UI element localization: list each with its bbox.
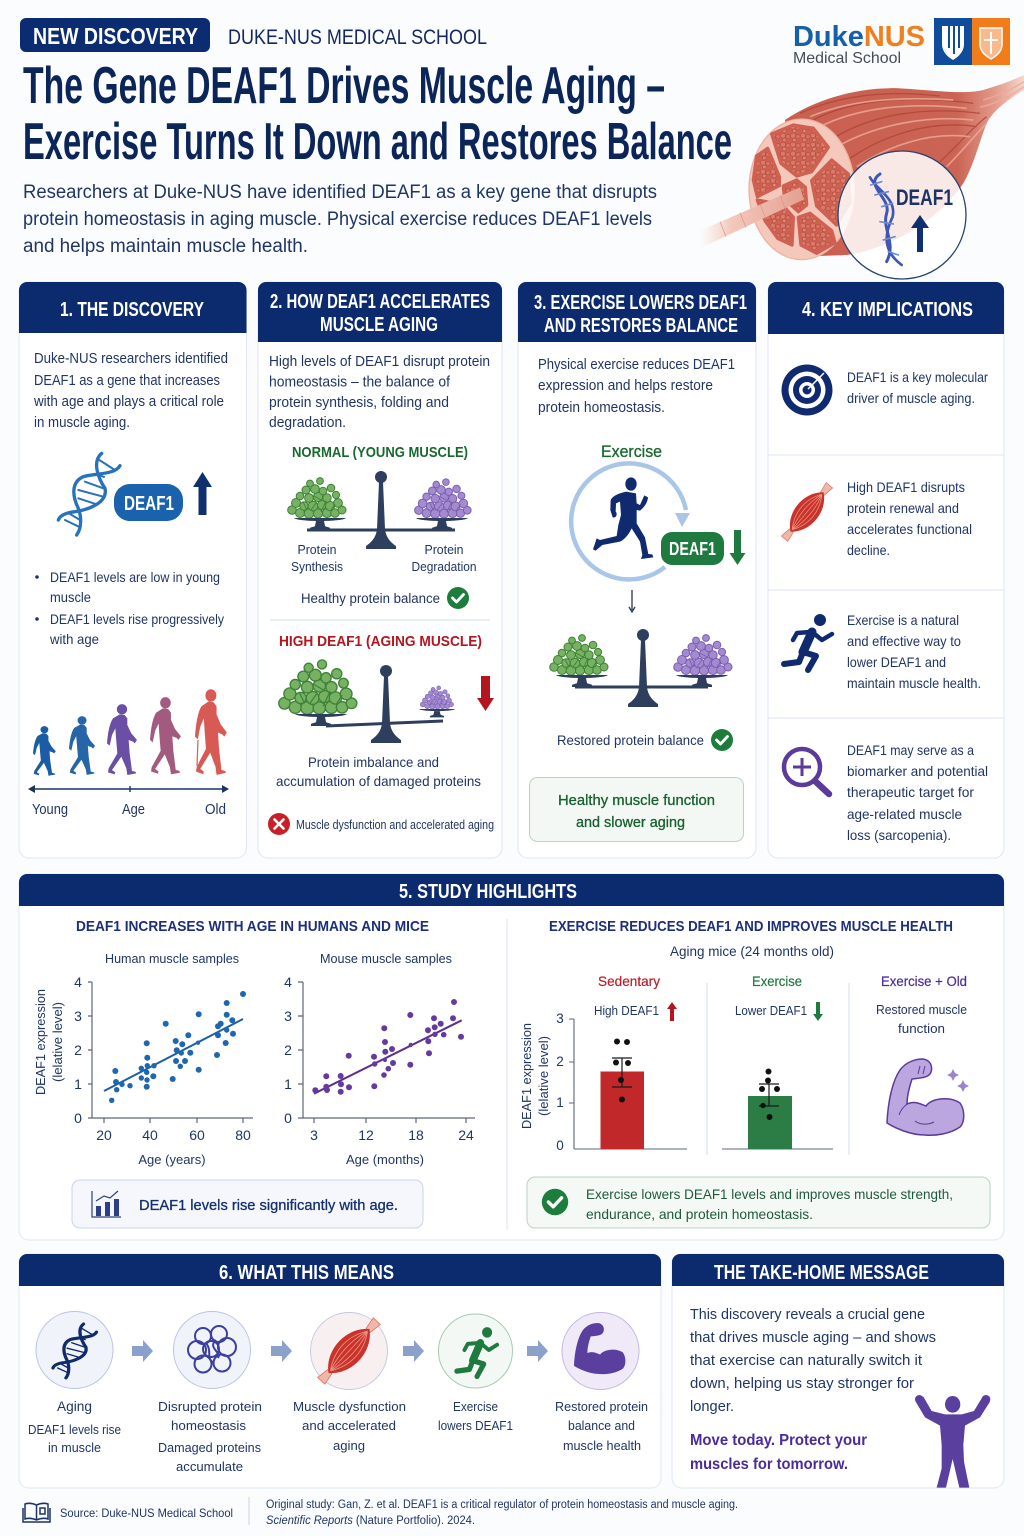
arrow 3 bbox=[403, 1340, 424, 1362]
implication text: exercise: lower DEAF1 and bbox=[847, 654, 946, 670]
chart: human scatter: 80 bbox=[235, 1127, 251, 1143]
call to action: muscles for tomorrow. bbox=[690, 1456, 848, 1473]
label: protein synthesis: Protein bbox=[298, 542, 336, 557]
text block bbox=[33, 350, 228, 431]
step 3: muscle dysfunction: Muscle dysfunction bbox=[293, 1399, 406, 1414]
step 3: muscle dysfunction: and accelerated bbox=[302, 1418, 396, 1433]
footer: source: Source: Duke-NUS Medical School bbox=[60, 1506, 233, 1520]
DEAF1 pill green bbox=[661, 532, 724, 565]
restored balance note bbox=[557, 729, 733, 751]
step 4: exercise: lowers DEAF1 bbox=[438, 1418, 513, 1433]
bar chart: sedentary: 2 bbox=[556, 1054, 564, 1069]
arrow down red bbox=[477, 676, 494, 711]
bar chart: sedentary: Sedentary bbox=[598, 973, 660, 989]
implication text: renewal: High DEAF1 disrupts bbox=[847, 479, 965, 495]
implication text: exercise: Exercise is a natural bbox=[847, 612, 959, 628]
text block: down, helping us stay stronger for bbox=[690, 1375, 914, 1392]
text block: degradation. bbox=[269, 414, 346, 431]
text block bbox=[690, 1306, 936, 1415]
chart: mouse scatter: Age (months) bbox=[346, 1152, 424, 1167]
arrow up bbox=[193, 472, 212, 515]
step 1: aging: Aging bbox=[57, 1398, 92, 1414]
intro text bbox=[23, 182, 657, 257]
exercise label: Exercise bbox=[601, 442, 662, 461]
implication text: driver: driver of muscle aging. bbox=[847, 390, 975, 406]
DEAF1 pill bbox=[114, 484, 183, 521]
text block: that exercise can naturally switch it bbox=[690, 1352, 923, 1369]
intro text: and helps maintain muscle health. bbox=[23, 236, 308, 257]
aging figures bbox=[33, 689, 227, 776]
callout: rise with age: DEAF1 levels rise significantly with age. bbox=[139, 1197, 398, 1214]
label: protein synthesis: Synthesis bbox=[291, 559, 343, 574]
callout: exercise benefit bbox=[527, 1177, 990, 1228]
step 5: restored bbox=[555, 1312, 648, 1453]
step 1: aging bbox=[28, 1312, 121, 1455]
arrow 2 bbox=[271, 1340, 292, 1362]
step 2: disrupted homeostasis bbox=[158, 1312, 262, 1474]
text block bbox=[538, 356, 735, 416]
chart: human scatter: 1 bbox=[74, 1076, 82, 1092]
heading: 5. STUDY HIGHLIGHTS bbox=[399, 881, 577, 903]
step 1: aging: in muscle bbox=[48, 1440, 101, 1455]
heading: 3. EXERCISE LOWERS DEAF1 bbox=[534, 292, 747, 314]
institution name: DUKE-NUS MEDICAL SCHOOL bbox=[228, 26, 487, 49]
step 3: muscle dysfunction: aging bbox=[333, 1438, 365, 1453]
y axis title right: DEAF1 expression bbox=[520, 1023, 534, 1129]
footer: citation bbox=[266, 1499, 738, 1527]
panel: 6. what this means bbox=[19, 1254, 661, 1488]
label: protein degradation: Degradation bbox=[412, 559, 476, 574]
implication text: exercise bbox=[847, 612, 981, 691]
badge: new discovery: NEW DISCOVERY bbox=[33, 23, 198, 49]
intro text: protein homeostasis in aging muscle. Physical exercise reduces DEAF1 levels bbox=[23, 209, 652, 230]
step 2: disrupted homeostasis: Disrupted protein bbox=[158, 1399, 262, 1414]
heading: 1. THE DISCOVERY bbox=[60, 299, 205, 321]
balance scale: normal bbox=[288, 471, 471, 549]
exercise loop with runner bbox=[571, 463, 690, 579]
implication text: exercise: and effective way to bbox=[847, 633, 961, 649]
step 5: restored: muscle health bbox=[563, 1438, 641, 1453]
bar chart: exercise bbox=[722, 973, 833, 1149]
text block: imbalance bbox=[276, 754, 481, 789]
connector arrow bbox=[629, 590, 635, 612]
panel: take-home message bbox=[672, 1254, 1004, 1488]
column: exercise + old: function bbox=[898, 1021, 945, 1036]
label: protein synthesis bbox=[291, 542, 343, 574]
badge: new discovery bbox=[20, 18, 210, 52]
DEAF1 pill green: DEAF1 bbox=[669, 539, 716, 559]
implication text: renewal: accelerates functional bbox=[847, 521, 972, 537]
callout: healthy function: Healthy muscle function bbox=[558, 792, 715, 809]
chart: mouse scatter: 4 bbox=[284, 974, 292, 990]
intro text: Researchers at Duke-NUS have identified DEAF1 as a key gene that disrupts bbox=[23, 182, 657, 203]
column: exercise + old: Restored muscle bbox=[876, 1002, 967, 1017]
callout: DEAF1 magnified circle bbox=[838, 151, 966, 279]
y axis title right: (lelative level) bbox=[537, 1036, 551, 1116]
callout: healthy function: and slower aging bbox=[576, 814, 685, 831]
implication text: biomarker: age-related muscle bbox=[847, 806, 962, 822]
icon: flexed arm bbox=[887, 1059, 969, 1135]
heading: THE TAKE-HOME MESSAGE bbox=[714, 1262, 929, 1284]
illustration: muscle cross-section bbox=[700, 75, 1024, 279]
chart caption: Aging mice (24 months old) bbox=[670, 944, 834, 959]
step 2: disrupted homeostasis: accumulate bbox=[176, 1459, 243, 1474]
logo: Duke-NUS: DukeNUS bbox=[793, 21, 925, 53]
implication text: renewal: protein renewal and bbox=[847, 500, 959, 516]
icon: person with raised arms bbox=[915, 1395, 990, 1488]
chart: human scatter: 2 bbox=[74, 1042, 82, 1058]
callout: exercise benefit: endurance, and protein homeostasis. bbox=[586, 1206, 813, 1222]
panel: 5. study highlights bbox=[19, 874, 1004, 1240]
step 2: disrupted homeostasis: homeostasis bbox=[171, 1418, 247, 1433]
chart: mouse scatter: 12 bbox=[358, 1127, 374, 1143]
icon: magnifier bbox=[784, 749, 829, 794]
implication text: driver bbox=[847, 369, 988, 406]
implication text: biomarker: therapeutic target for bbox=[847, 784, 974, 800]
icon: runner bbox=[784, 614, 832, 670]
label: protein degradation bbox=[412, 542, 476, 574]
bullet list: DEAF1 levels are low in young bbox=[50, 569, 220, 585]
chart: mouse scatter bbox=[284, 951, 475, 1167]
implication text: exercise: maintain muscle health. bbox=[847, 675, 981, 691]
icon: bar chart bbox=[92, 1191, 121, 1217]
text block: imbalance: accumulation of damaged proteins bbox=[276, 773, 481, 789]
dysfunction note bbox=[268, 813, 494, 835]
restored balance note: Restored protein balance bbox=[557, 733, 704, 748]
callout: exercise benefit: Exercise lowers DEAF1 levels and improves muscle strength, bbox=[586, 1186, 953, 1202]
arrow down green bbox=[730, 530, 746, 565]
heading: 2. HOW DEAF1 ACCELERATES bbox=[270, 291, 490, 313]
healthy balance note: Healthy protein balance bbox=[301, 591, 440, 606]
text block: imbalance: Protein imbalance and bbox=[308, 754, 439, 770]
bar chart: sedentary: 1 bbox=[556, 1095, 564, 1110]
title bbox=[23, 57, 732, 171]
chart: mouse scatter: 18 bbox=[408, 1127, 424, 1143]
text block: in muscle aging. bbox=[34, 414, 130, 431]
bullet list: DEAF1 levels rise progressively bbox=[50, 611, 224, 627]
text block bbox=[269, 353, 490, 431]
panel: 3. exercise lowers DEAF1 bbox=[518, 282, 756, 858]
chart: mouse scatter: 0 bbox=[284, 1110, 292, 1126]
implication text: biomarker: loss (sarcopenia). bbox=[847, 827, 951, 843]
subheading: age: DEAF1 INCREASES WITH AGE IN HUMANS AND MICE bbox=[76, 918, 429, 935]
bar chart: sedentary: High DEAF1 bbox=[594, 1003, 659, 1018]
panel: 1. the discovery bbox=[19, 282, 246, 858]
text block: longer. bbox=[690, 1398, 734, 1415]
age axis arrow: Old bbox=[205, 802, 226, 818]
implication text: renewal: decline. bbox=[847, 542, 890, 558]
y axis title left bbox=[33, 989, 65, 1095]
implication text: biomarker: biomarker and potential bbox=[847, 763, 988, 779]
text block: protein synthesis, folding and bbox=[269, 394, 449, 411]
logo: Duke-NUS bbox=[793, 18, 1010, 67]
footer: citation: Original study: Gan, Z. et al. DEAF1 is a critical regulator of protein homeostasis and muscle aging. bbox=[266, 1499, 738, 1511]
balance scale: restored bbox=[550, 629, 732, 707]
callout: healthy function bbox=[530, 778, 744, 842]
arrow 4 bbox=[527, 1340, 548, 1362]
chart: mouse scatter: Mouse muscle samples bbox=[320, 951, 452, 966]
step 2: disrupted homeostasis: Damaged proteins bbox=[158, 1440, 261, 1455]
dysfunction note: Muscle dysfunction and accelerated aging bbox=[296, 818, 494, 832]
chart: human scatter: 40 bbox=[142, 1127, 158, 1143]
bar chart: sedentary: 0 bbox=[556, 1138, 564, 1153]
chart: human scatter: 0 bbox=[74, 1110, 82, 1126]
text block: expression and helps restore bbox=[538, 377, 713, 394]
age axis arrow bbox=[28, 785, 229, 818]
callout: rise with age bbox=[72, 1180, 423, 1228]
y axis title left: (lelative level) bbox=[50, 1002, 65, 1082]
subheading: high DEAF1: HIGH DEAF1 (AGING MUSCLE) bbox=[279, 633, 482, 650]
icon: DNA helix bbox=[58, 453, 120, 535]
arrow 1 bbox=[132, 1340, 153, 1362]
chart: human scatter: 20 bbox=[96, 1127, 112, 1143]
step 5: restored: balance and bbox=[568, 1418, 635, 1433]
balance scale: imbalanced bbox=[279, 660, 455, 743]
heading: AND RESTORES BALANCE bbox=[544, 315, 738, 337]
chart: mouse scatter: 1 bbox=[284, 1076, 292, 1092]
title: The Gene DEAF1 Drives Muscle Aging – bbox=[23, 57, 665, 115]
step 3: muscle dysfunction bbox=[293, 1312, 406, 1453]
step 1: aging: DEAF1 levels rise bbox=[28, 1422, 121, 1437]
y axis title right bbox=[520, 1023, 551, 1129]
text block: protein homeostasis. bbox=[538, 399, 665, 416]
step 5: restored: Restored protein bbox=[555, 1399, 648, 1414]
heading: MUSCLE AGING bbox=[320, 314, 438, 336]
text block: Duke-NUS researchers identified bbox=[34, 350, 228, 367]
chart: mouse scatter: 3 bbox=[284, 1008, 292, 1024]
step 4: exercise bbox=[438, 1314, 513, 1433]
footer: source bbox=[23, 1503, 233, 1522]
bullet list bbox=[35, 569, 224, 647]
chart: human scatter: Age (years) bbox=[138, 1152, 206, 1167]
icon: book bbox=[23, 1503, 50, 1522]
implication text: biomarker: DEAF1 may serve as a bbox=[847, 742, 974, 758]
logo: Duke-NUS: Medical School bbox=[793, 50, 901, 67]
heading bbox=[270, 291, 490, 336]
column: exercise + old bbox=[876, 973, 969, 1135]
DEAF1 pill: DEAF1 bbox=[124, 493, 174, 515]
healthy balance note bbox=[301, 587, 469, 609]
implication text: driver: DEAF1 is a key molecular bbox=[847, 369, 988, 385]
panel: 4. key implications bbox=[768, 282, 1004, 858]
heading bbox=[534, 292, 747, 337]
chart: mouse scatter: 24 bbox=[458, 1127, 474, 1143]
chart: human scatter: 3 bbox=[74, 1008, 82, 1024]
text block: with age and plays a critical role bbox=[33, 393, 224, 410]
age axis arrow: Young bbox=[32, 802, 68, 818]
column: exercise + old: Exercise + Old bbox=[881, 973, 967, 989]
text block: This discovery reveals a crucial gene bbox=[690, 1306, 925, 1323]
chart: human scatter: Human muscle samples bbox=[105, 951, 239, 966]
chart: mouse scatter: 3 bbox=[310, 1127, 318, 1143]
implication text: renewal bbox=[847, 479, 972, 558]
heading: 4. KEY IMPLICATIONS bbox=[802, 299, 973, 321]
implication text: biomarker bbox=[847, 742, 988, 843]
bar chart: sedentary: 3 bbox=[556, 1011, 564, 1026]
icon: muscle bbox=[776, 478, 838, 546]
chart: human scatter bbox=[74, 951, 253, 1167]
label: protein degradation: Protein bbox=[424, 542, 464, 557]
bullet list: with age bbox=[49, 631, 99, 647]
text block: High levels of DEAF1 disrupt protein bbox=[269, 353, 490, 370]
text block: DEAF1 as a gene that increases bbox=[34, 372, 220, 389]
bar chart: sedentary bbox=[556, 973, 687, 1153]
text block: Physical exercise reduces DEAF1 bbox=[538, 356, 735, 373]
bar chart: exercise: Lower DEAF1 bbox=[735, 1003, 807, 1018]
call to action: Move today. Protect your bbox=[690, 1432, 867, 1449]
callout: DEAF1 magnified circle: DEAF1 bbox=[896, 185, 953, 210]
age axis arrow: Age bbox=[122, 802, 145, 818]
footer: citation: Scientific Reports (Nature Portfolio). 2024. bbox=[266, 1515, 475, 1527]
y axis title left: DEAF1 expression bbox=[33, 989, 48, 1095]
icon: target bbox=[782, 364, 832, 416]
panel: 2. how DEAF1 accelerates muscle aging bbox=[258, 282, 502, 858]
call to action bbox=[690, 1432, 867, 1473]
text block: that drives muscle aging – and shows bbox=[690, 1329, 936, 1346]
step 4: exercise: Exercise bbox=[453, 1399, 498, 1414]
subheading: exercise: EXERCISE REDUCES DEAF1 AND IMPROVES MUSCLE HEALTH bbox=[549, 918, 953, 935]
bullet list: muscle bbox=[50, 589, 91, 605]
chart: mouse scatter: 2 bbox=[284, 1042, 292, 1058]
chart: human scatter: 4 bbox=[74, 974, 82, 990]
text block: homeostasis – the balance of bbox=[269, 374, 451, 390]
subheading: normal: NORMAL (YOUNG MUSCLE) bbox=[292, 444, 468, 461]
chart: human scatter: 60 bbox=[189, 1127, 205, 1143]
heading: 6. WHAT THIS MEANS bbox=[219, 1262, 394, 1284]
bar chart: exercise: Exercise bbox=[752, 973, 802, 989]
